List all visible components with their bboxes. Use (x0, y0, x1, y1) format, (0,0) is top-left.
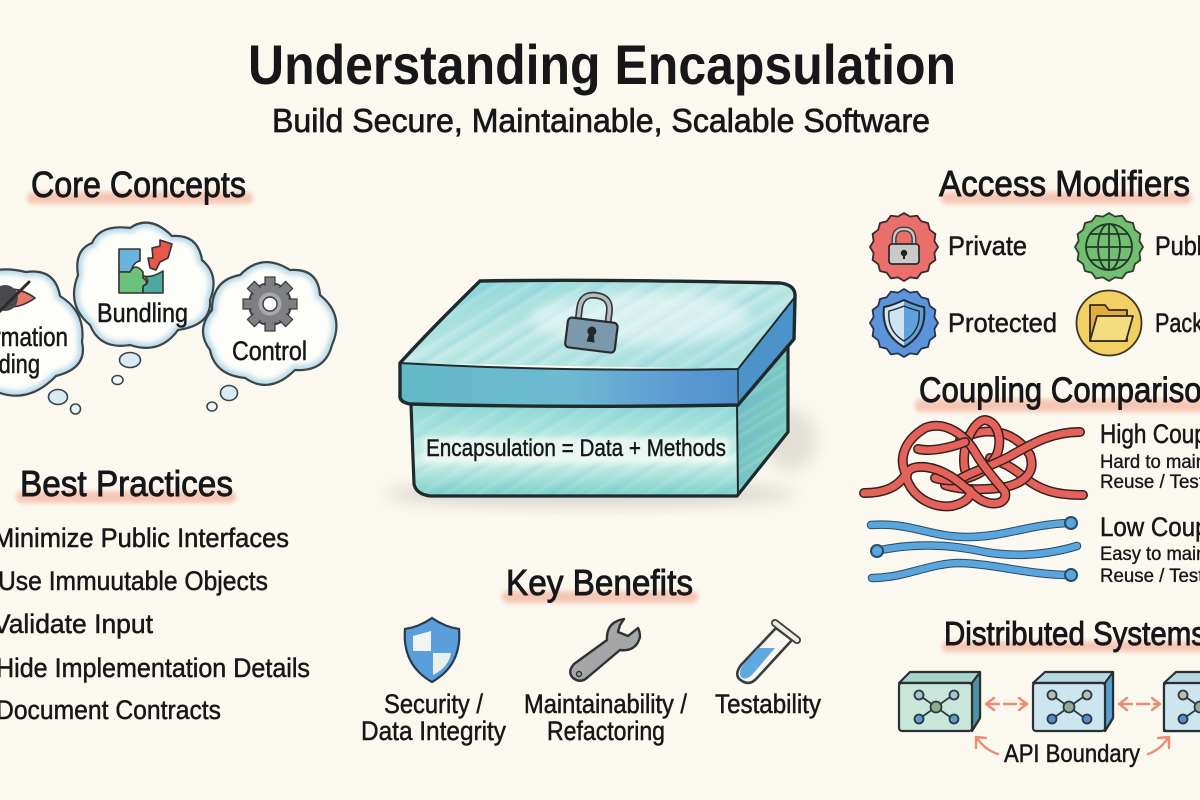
icon: test tube (737, 623, 797, 683)
thought cloud: control: Control (232, 336, 307, 366)
icon: wrench (570, 619, 640, 681)
box label: Encapsulation = Data + Methods (426, 435, 726, 462)
thought cloud: control (203, 262, 336, 411)
benefit: security (361, 618, 506, 746)
panel: core concepts (0, 164, 336, 414)
benefit: testability (715, 623, 821, 719)
arrow: block 1 to block 2 (986, 698, 1027, 710)
icon: crossed-out eye (0, 282, 35, 316)
list of practices: Use Immuutable Objects (0, 566, 268, 596)
heading: core concepts: Core Concepts (31, 164, 246, 205)
illustration: tangled red rope, high coupling (864, 420, 1083, 506)
label: api boundary: API Boundary (1004, 740, 1140, 768)
badge: public (1075, 213, 1200, 281)
icon: puzzle pieces (119, 240, 172, 293)
heading: best practices: Best Practices (20, 463, 233, 504)
arrow: block 2 to block 3 (1119, 698, 1160, 710)
benefit: maintainability: Refactoring (547, 716, 665, 746)
icon: shield (405, 618, 459, 682)
list of practices: Document Contracts (0, 695, 221, 725)
benefit: maintainability (524, 619, 687, 746)
icon: folder (1090, 305, 1133, 341)
badge: protected: Protected (948, 308, 1057, 338)
badge: protected (870, 289, 1057, 357)
icon: node graph (1048, 690, 1092, 724)
icon: gear (243, 277, 297, 331)
thought cloud: bundling: Bundling (97, 298, 188, 328)
list of practices (0, 523, 310, 725)
list of practices: Minimize Public Interfaces (0, 523, 289, 553)
title: Understanding Encapsulation (248, 33, 956, 96)
box body (405, 340, 791, 500)
panel: coupling comparison (864, 371, 1200, 587)
panel: distributed systems (899, 615, 1200, 768)
icon: node graph (914, 690, 958, 724)
text: low coupling (1100, 512, 1200, 587)
heading: key benefits: Key Benefits (506, 562, 693, 603)
central illustration: locked box (385, 275, 816, 505)
text: high coupling (1100, 419, 1200, 493)
service block 3 (1164, 672, 1200, 731)
icon: shield (884, 300, 924, 347)
benefit: testability: Testability (715, 689, 821, 719)
badge: package (1076, 290, 1200, 356)
icon: padlock (565, 292, 621, 353)
service block 1 (899, 672, 980, 731)
icon: node graph (1178, 690, 1200, 724)
thought cloud: bundling (74, 223, 214, 384)
panel: access modifiers (870, 163, 1200, 357)
service block 2 (1033, 672, 1113, 731)
badge: private (870, 213, 1027, 281)
icon: globe (1086, 224, 1132, 270)
benefit: maintainability: Maintainability / (524, 689, 687, 719)
list of practices: Hide Implementation Details (0, 653, 310, 683)
benefit: security: Data Integrity (361, 716, 506, 746)
thought cloud: information hiding (0, 269, 83, 414)
badge: private: Private (948, 231, 1027, 261)
panel: key benefits (361, 562, 821, 746)
icon: padlock (889, 229, 919, 264)
panel: best practices (0, 463, 310, 725)
benefit: security: Security / (384, 689, 483, 719)
box lid (395, 275, 800, 406)
illustration: separate blue lines, low coupling (871, 517, 1077, 581)
subtitle: Build Secure, Maintainable, Scalable Software (272, 102, 930, 139)
